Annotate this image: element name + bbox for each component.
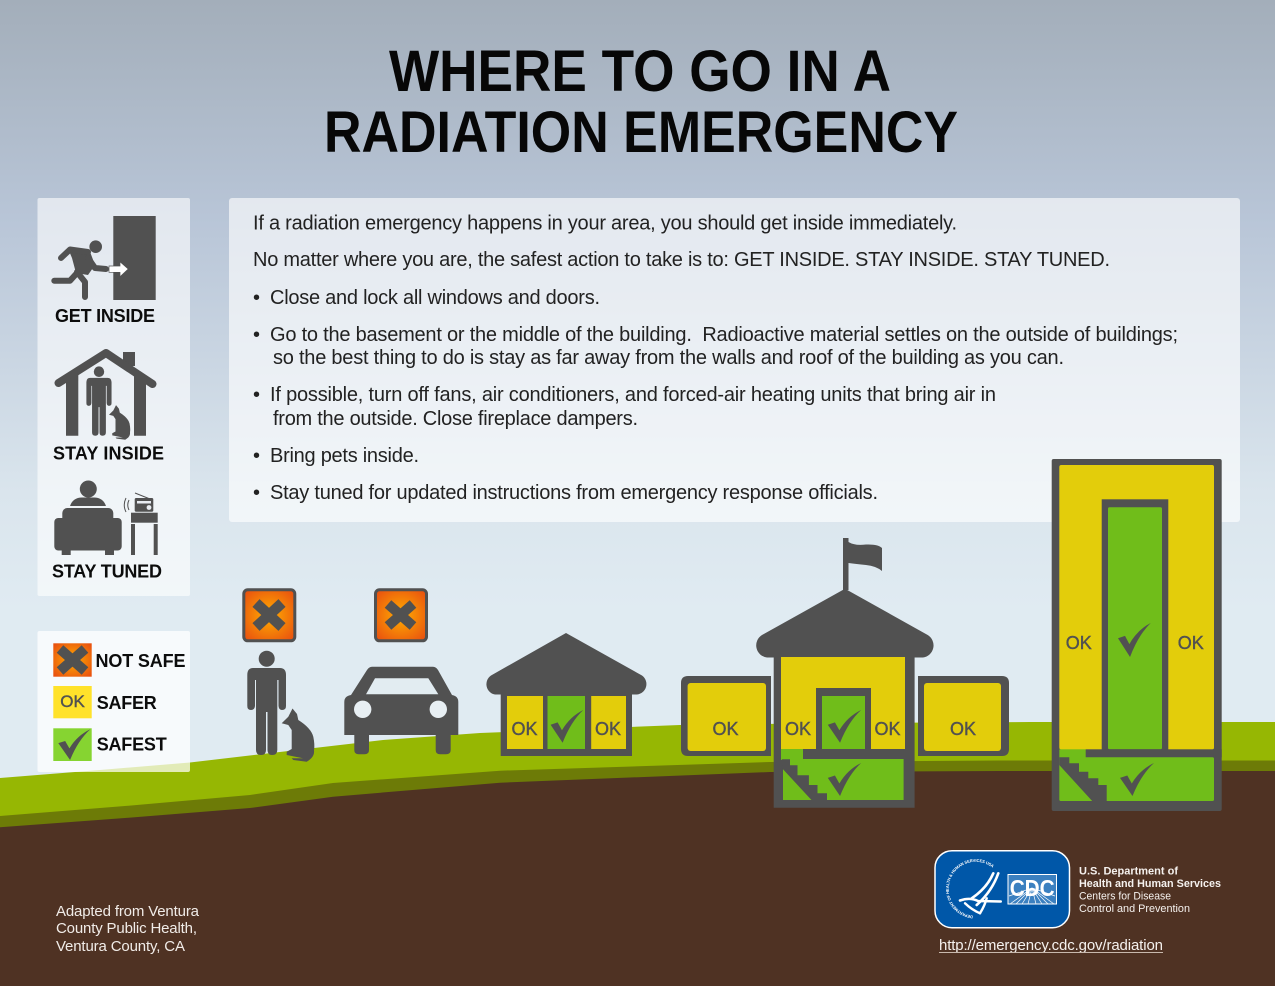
panel: instructions text: • [253,324,260,346]
panel: legend [38,631,190,772]
legend: not safe: NOT SAFE [96,651,186,671]
building: small house: OK [511,719,538,739]
icon: car [344,667,458,754]
logo: HHS and CDC [934,850,1070,928]
right annex [918,676,1009,756]
legend: not safe [53,643,185,677]
label: stay tuned: STAY TUNED [52,562,162,582]
agency name: Control and Prevention [1079,903,1190,915]
panel: instructions text: • [253,445,260,467]
credit: adapted from: Ventura County, CA [56,938,185,955]
left annex: OK [712,719,739,739]
building: small house: OK [595,719,621,739]
icon: CDC square: CDC [1010,875,1055,901]
icon: not safe sign over person [244,590,295,641]
link text: http://emergency.cdc.gov/radiation [939,937,1163,954]
ground layers: grass, topsoil, earth [0,722,1275,986]
legend: safer: SAFER [97,693,157,713]
icon: person in armchair with radio [54,480,158,555]
label: stay inside: STAY INSIDE [53,444,164,464]
panel: instructions text: If a radiation emergency happens in your area, you should get inside immediately. [253,212,957,234]
label: get inside: GET INSIDE [55,306,155,326]
legend: safer: OK [60,692,85,711]
legend: safest [53,728,167,761]
building: tall high-rise: OK [1066,633,1092,653]
icon: not safe sign over car [376,590,426,641]
panel: instructions text: from the outside. Close fireplace dampers. [273,408,638,430]
credit: adapted from: Adapted from Ventura [56,903,200,920]
panel: instructions text: Close and lock all windows and doors. [270,287,600,309]
not safe: person and dog outdoors [244,590,314,762]
credit: adapted from [56,903,200,955]
icon: eagle [949,862,1001,916]
right annex: OK [950,719,976,739]
panel: instructions text: • [253,287,260,309]
credit: adapted from: County Public Health, [56,920,197,937]
building: school with annexes [681,538,1009,808]
logo: HHS and CDC: DEPARTMENT OF HEALTH & HUMAN SERVICES USA [946,859,994,918]
panel: instructions text: • [253,384,260,406]
title [324,39,958,165]
panel: instructions text: Go to the basement or the middle of the building. Radioactive material settles on the outside of buildings; [270,324,1178,346]
building: small house [486,633,646,756]
main school building [756,538,934,808]
agency name: Centers for Disease [1079,890,1171,902]
building: tall high-rise: OK [1178,633,1204,653]
panel: instructions text: Stay tuned for updated instructions from emergency response officials. [270,482,878,504]
panel: get inside, stay inside, stay tuned [38,198,190,596]
building: tall high-rise [1052,459,1222,811]
not safe: car [344,590,458,754]
panel: instructions text: No matter where you are, the safest action to take is to: GET INSIDE. STAY INSIDE. STAY TUNED. [253,249,1110,271]
panel: instructions text: • [253,482,260,504]
flag [843,538,882,590]
main school building: OK [874,719,901,739]
icon: person running through door [54,216,156,300]
panel: instructions text: Bring pets inside. [270,445,419,467]
icon: sitting dog [282,708,314,762]
title: RADIATION EMERGENCY [324,100,958,165]
agency name: Health and Human Services [1079,878,1221,890]
title: WHERE TO GO IN A [389,39,891,104]
panel: instructions text [229,198,1240,522]
icon: person and dog in house [58,352,152,440]
panel: instructions text: so the best thing to do is stay as far away from the walls and roof of the building as you can. [273,347,1064,369]
legend: safer [53,686,157,718]
agency name [1079,866,1221,915]
legend: safest: SAFEST [97,735,167,755]
agency name: U.S. Department of [1079,866,1178,878]
left annex [681,676,771,756]
main school building: OK [785,719,811,739]
icon: standing person [247,651,286,755]
panel: instructions text: If possible, turn off fans, air conditioners, and forced-air heating units that bring air in [270,384,996,406]
